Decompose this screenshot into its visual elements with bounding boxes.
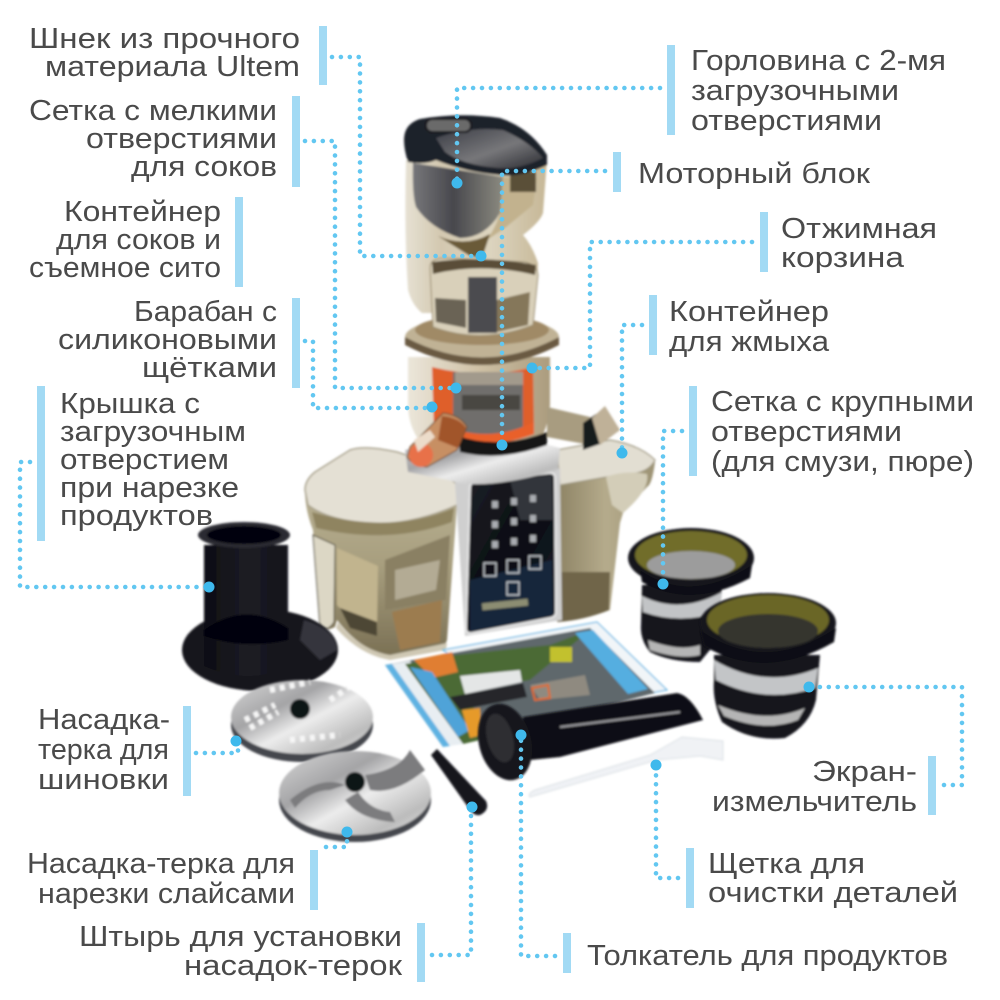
label: shredding disc: Насадка- (38, 704, 170, 736)
label: neck: отверстиями (691, 105, 882, 137)
label: coarse mesh: Сетка с крупными (711, 386, 974, 418)
label: pin: Штырь для установки (79, 921, 402, 953)
label: lid: продуктов (60, 500, 213, 532)
label: brush: очистки деталей (708, 877, 958, 909)
label: neck: Горловина с 2-мя (691, 45, 946, 77)
label: pusher: Толкатель для продуктов (587, 940, 948, 972)
leader: pin (432, 802, 478, 955)
label: lid: загрузочным (60, 416, 246, 448)
label: fine mesh: Сетка с мелкими (29, 95, 277, 127)
leader: motor (496, 171, 605, 450)
label: lid: при нарезке (60, 472, 239, 504)
label: fine mesh (29, 95, 300, 187)
leader: neck (452, 88, 660, 188)
label: slicing disc: нарезки слайсами (38, 878, 295, 910)
label: neck: загрузочными (691, 75, 899, 107)
cleaning brush (529, 737, 723, 797)
label: lid (37, 386, 246, 541)
leader: lid (20, 462, 214, 592)
silver motor base (405, 437, 560, 484)
label: slicing disc (27, 848, 318, 910)
fine crushing strainer (700, 593, 836, 739)
label: juice container: для соков и (56, 224, 221, 256)
label: coarse mesh: (для смузи, пюре) (711, 446, 974, 478)
label: press basket: корзина (781, 242, 905, 274)
label: drum (58, 296, 300, 388)
label: coarse mesh: отверстиями (711, 416, 902, 448)
label: shredding disc (38, 704, 191, 796)
label: juice container (29, 196, 243, 287)
label: coarse mesh (689, 386, 974, 478)
label: auger: материала Ultem (45, 51, 300, 83)
leader: shredding disc (196, 736, 242, 753)
leader: auger (332, 57, 486, 262)
label: motor: Моторный блок (638, 158, 870, 190)
label: pulp container: для жмыха (669, 326, 830, 358)
label: juice container: съемное сито (29, 252, 221, 284)
slicing grater disc (279, 750, 431, 842)
label: auger: Шнек из прочного (29, 23, 300, 55)
feed hopper (405, 160, 547, 336)
leader: pulp container (616, 325, 642, 458)
coarse strainer (628, 528, 754, 662)
label: brush (686, 848, 958, 909)
label: shredding disc: шиновки (38, 764, 169, 796)
label: press basket (760, 212, 937, 274)
leader: crusher screen (804, 682, 962, 785)
label: drum: силиконовыми (58, 324, 277, 356)
label: auger (29, 23, 327, 85)
label: fine mesh: для соков (131, 151, 277, 183)
leader: fine mesh (305, 141, 462, 394)
label: shredding disc: терка для (38, 734, 169, 766)
label: crusher screen (712, 756, 936, 818)
label: fine mesh: отверстиями (86, 123, 277, 155)
food pusher (470, 693, 703, 786)
label: pulp container (649, 295, 830, 358)
juicing bowl (408, 357, 550, 456)
label: drum: щётками (142, 352, 277, 384)
label: motor (613, 152, 870, 192)
leader: brush (650, 760, 678, 878)
label: slicing disc: Насадка-терка для (27, 848, 295, 880)
installation pin (431, 749, 487, 815)
label: neck (667, 45, 946, 137)
label: pin: насадок-терок (184, 950, 402, 982)
leader: press basket (526, 242, 752, 374)
right pulp spout (547, 406, 620, 450)
silver base and control panel (455, 468, 562, 636)
leader: drum (305, 341, 438, 412)
leader: slicing disc (326, 826, 352, 847)
leader: coarse mesh (658, 431, 682, 590)
label: crusher screen: Экран- (812, 756, 917, 788)
label: brush: Щетка для (708, 848, 865, 880)
label: pulp container: Контейнер (669, 296, 829, 328)
label: drum: Барабан с (134, 296, 277, 328)
label: press basket: Отжимная (781, 213, 937, 245)
bowl lid (405, 315, 559, 365)
juicer main unit (305, 115, 655, 660)
hopper lid (404, 115, 547, 176)
booklet (385, 622, 667, 747)
left pulp container (305, 448, 460, 660)
label: lid: отверстием (60, 444, 229, 476)
right juice container (557, 440, 655, 622)
left juice spout (407, 413, 467, 467)
label: crusher screen: измельчитель (712, 786, 917, 818)
shredding grater disc (231, 680, 373, 762)
label: juice container: Контейнер (64, 196, 221, 228)
label: pin (79, 921, 425, 982)
label: lid: Крышка с (60, 388, 200, 420)
black feed cup with disc (182, 522, 338, 691)
leader: pusher (516, 730, 555, 956)
